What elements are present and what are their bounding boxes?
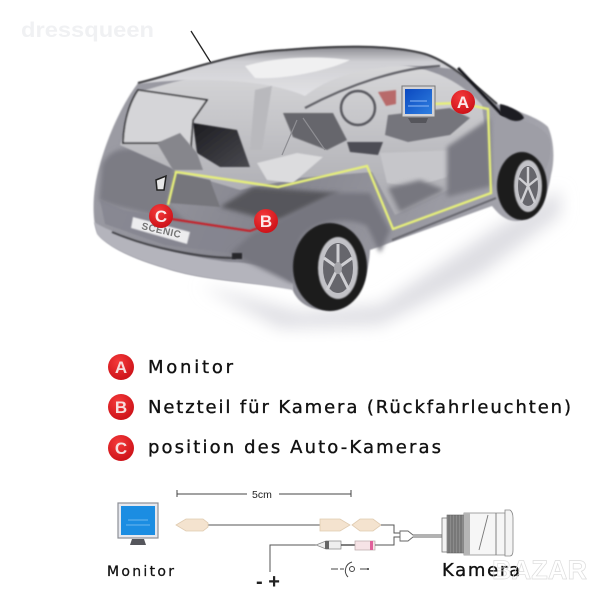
label: Kamera: Kamera (442, 560, 520, 581)
tail lamp reflector (232, 253, 242, 259)
watermark: dressqueen: dressqueen (21, 19, 154, 42)
rear bumper (94, 222, 293, 290)
windshield dark edge (458, 68, 505, 118)
dashboard (385, 108, 470, 142)
licence plate (131, 217, 190, 244)
marker B (254, 209, 278, 233)
dimension: 5cm (177, 489, 351, 501)
legend (108, 354, 571, 461)
legend item B: Netzteil für Kamera (Rückfahrleuchten) (148, 397, 571, 418)
legend item A (108, 354, 234, 380)
lower rear panel (100, 200, 253, 253)
wiring diagram (107, 489, 587, 593)
bumper shadow line (112, 232, 236, 258)
label: minus plus: - + (256, 571, 280, 593)
rear quarter panel (230, 193, 390, 284)
legend item C: C (115, 439, 127, 458)
tailgate (99, 149, 190, 225)
sunroof (245, 58, 350, 78)
marker A (451, 90, 475, 114)
watermark: Bazar: BAZAR (492, 555, 587, 585)
rear window (123, 90, 207, 157)
icon: monitor (118, 503, 158, 545)
side window frame (305, 66, 440, 108)
folded seat (257, 153, 323, 183)
front wheel (497, 152, 547, 220)
rear seat (157, 133, 203, 170)
licence plate: SCENIC (140, 221, 182, 241)
cable junction (400, 531, 442, 541)
marker B: B (260, 212, 272, 231)
front wing (495, 115, 551, 190)
rear seat dark back (193, 123, 250, 167)
legend item C: position des Auto-Kameras (148, 437, 441, 458)
headlight and mirror (500, 104, 524, 121)
pillar (250, 86, 272, 150)
roof panel (138, 47, 458, 96)
marker C: C (155, 207, 167, 226)
marker C (149, 204, 173, 228)
cargo seat (170, 173, 220, 207)
rear wheel (293, 223, 367, 311)
floor seat base (380, 150, 460, 187)
cable connectors: video (176, 519, 400, 533)
lower cabin seat (388, 180, 445, 212)
camera body (442, 510, 513, 556)
centre console (347, 142, 383, 155)
car illustration (94, 31, 560, 328)
symbol: video signal (331, 562, 369, 577)
roof rim (138, 47, 497, 104)
legend item B: B (115, 398, 127, 417)
monitor on dashboard (402, 86, 435, 123)
car body silhouette (94, 47, 553, 310)
legend item A: A (115, 358, 127, 377)
cabin interior (120, 62, 490, 215)
yellow wiring (168, 103, 491, 229)
dimension: 5cm: 5cm (252, 489, 272, 501)
rear logo (156, 176, 166, 190)
cable connectors: power (270, 537, 400, 572)
cargo dark shadow (220, 187, 340, 220)
steering wheel (341, 91, 375, 125)
door sill dark (392, 198, 496, 240)
red wiring (165, 218, 268, 231)
front seats (283, 113, 347, 150)
antenna (191, 31, 218, 74)
door panel dark (447, 118, 492, 197)
red interior accent (378, 90, 396, 106)
ground shadow (200, 190, 560, 328)
seat frame lines (282, 118, 325, 155)
legend item A: Monitor (148, 357, 234, 378)
marker A: A (457, 93, 469, 112)
label: Monitor: Monitor (107, 564, 174, 580)
